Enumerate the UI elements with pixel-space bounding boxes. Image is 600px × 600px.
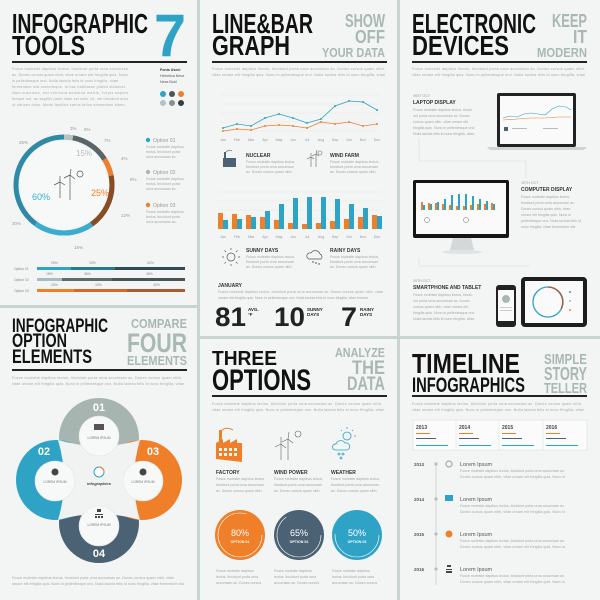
cloverleaf diagram: LOREM IPSUM xyxy=(87,523,111,527)
text: january: ornare elit fringilla quis. Nunc in pellentesque orci. Nulla lacinia felis id nunc fringilla, vitae fermen xyxy=(218,296,368,300)
text: wind farm: Fusce molestie dapibus lectus, xyxy=(330,160,379,164)
panel: infographic option elements: ornare elit fringilla quis. Nunc in pellentesque orci. Nulla lacinia felis id nunc fringilla, vitae fermentum nisi xyxy=(12,582,184,586)
text block: intro: tempor est, ac sagittis justo diam vel odio. Ut, vel tincidunt arcu xyxy=(12,97,128,101)
text: laptop display: unt porta urna accumsan ac. Donec xyxy=(413,114,470,118)
legend: lectus, tincidunt porta xyxy=(146,150,180,154)
legend xyxy=(146,138,184,224)
title: infographic option elements: ELEMENTS xyxy=(12,346,92,368)
circle: option 03 50% xyxy=(332,510,382,560)
cloverleaf diagram xyxy=(16,398,182,563)
panel: electronic devices: Fusce molestie dapibus lectus, tincidunt porta urna accumsan ac. Donec cursus quam nibh, xyxy=(412,67,585,71)
donut chart: 15% xyxy=(74,245,83,250)
circle: option 02 65% xyxy=(274,510,324,560)
line chart xyxy=(220,95,380,142)
donut chart: 12% xyxy=(121,213,130,218)
donut chart: 3% xyxy=(70,126,77,131)
timeline: 2013 xyxy=(414,462,425,467)
panel: three options: accumsan ac. Donec cursus xyxy=(332,581,377,585)
panel: three options: lectus, tincidunt porta urna xyxy=(332,575,374,579)
stacked bars: Option 02 xyxy=(14,278,29,282)
donut chart: 25% xyxy=(19,140,28,145)
subtitle: keep it modern: KEEP xyxy=(552,11,587,31)
timeline: Fusce molestie dapibus lectus, tincidunt porta urna accumsan ac. xyxy=(460,469,565,473)
panel: infographic option elements: vitae ornare elit fringilla quis. Nunc in pellentesque orci. Nulla lacinia felis id nunc fringilla, vitae xyxy=(12,382,184,386)
text: computer display: Fusce molestie dapibus lectus, xyxy=(521,195,570,199)
icon: weather xyxy=(332,427,356,459)
bar chart: Feb xyxy=(234,235,240,239)
text: weather xyxy=(331,470,380,493)
subtitle: analyze the data: DATA xyxy=(347,374,385,395)
text: wind power: tincidunt porta urna accumsan xyxy=(274,483,322,487)
text: weather: tincidunt porta urna accumsan xyxy=(331,483,379,487)
text: smartphone and tablet: Fusce molestie dapibus lectus, tincid- xyxy=(413,293,474,297)
stacked bars: 36% xyxy=(84,272,91,276)
subtitle: analyze the data xyxy=(335,345,385,395)
stacked bars: 33% xyxy=(95,283,102,287)
title: infographic tools: TOOLS xyxy=(12,30,85,61)
title: infographic tools xyxy=(12,8,148,61)
text block: intro: ac. Donec cursus quam nibh, vitae ornare elit fringilla quis. Nunc xyxy=(12,73,128,77)
panel: line & bar graph: Fusce molestie dapibus lectus, tincidunt porta urna accumsan ac. Donec cursus quam nibh, xyxy=(212,67,385,71)
legend: urna accumsan ac. xyxy=(146,187,176,191)
title: line&bar graph: GRAPH xyxy=(212,30,290,61)
text: computer display xyxy=(521,181,581,229)
panel: infographic option elements xyxy=(12,315,187,586)
circle: option 01 80%: OPTION 01 xyxy=(231,540,249,544)
text: smartphone and tablet xyxy=(413,279,481,321)
stacked bars xyxy=(14,261,185,293)
panel: three options: vitae ornare elit fringilla quis. Nunc in pellentesque orci. Nulla lacinia felis id nunc fringilla, vitae xyxy=(212,408,384,412)
subtitle: keep it modern: MODERN xyxy=(537,45,587,60)
subtitle: keep it modern: IT xyxy=(573,27,587,47)
subtitle: show off your data: YOUR DATA xyxy=(322,45,386,60)
text: factory xyxy=(216,470,265,493)
title: timeline infographics xyxy=(412,348,525,397)
icon: factory xyxy=(216,428,242,462)
fonts used + palette xyxy=(160,68,184,106)
text: computer display: ornare elit fringilla quis. Nunc in xyxy=(521,213,571,217)
text: laptop display xyxy=(413,94,475,136)
donut chart: 20% xyxy=(12,221,21,226)
cloverleaf diagram: LOREM IPSUM xyxy=(131,480,155,484)
panel: infographic option elements: Fusce molestie dapibus lectus, tincidunt porta urna accumsan ac. Donec cursus quam nibh, xyxy=(12,376,182,380)
big number 7: 7 xyxy=(154,2,186,69)
text: computer display: nunc fringilla, vitae fermentum nisi xyxy=(521,225,576,229)
title: electronic devices: DEVICES xyxy=(412,30,509,61)
circle: option 03 50%: OPTION 03 xyxy=(348,540,366,544)
timeline: 2015 xyxy=(414,532,425,537)
line chart: Oct xyxy=(346,138,352,142)
title: timeline infographics: INFOGRAPHICS xyxy=(412,374,525,397)
text: wind farm xyxy=(330,153,379,174)
text block: intro xyxy=(12,67,128,107)
text block: intro: Nam maximus, est vehicula euismod mattis, turpis sapien xyxy=(12,91,128,95)
text block: intro: in pellentesque orci. Nulla lacinia felis id nunc fringilla, vitae xyxy=(12,79,118,83)
bar chart: Nov xyxy=(360,235,366,239)
stacked bars: 25% xyxy=(51,261,58,265)
stats: SUNNY xyxy=(307,307,323,312)
timeline: Donec cursus quam nibh, vitae ornare elit fringilla quis. Nunc in xyxy=(460,545,565,549)
timeline: Lorem Ipsum xyxy=(460,462,493,468)
stats: 7 xyxy=(341,302,357,332)
text: nuclear xyxy=(246,153,295,174)
text: nuclear: tincidunt porta urna accumsan xyxy=(246,165,294,169)
icon: wind farm xyxy=(307,150,322,167)
text: wind farm: WIND FARM xyxy=(330,153,359,159)
text: wind power: Fusce molestie dapibus lectus, xyxy=(274,477,323,481)
line chart: Nov xyxy=(360,138,366,142)
stacked bars: 42% xyxy=(147,261,154,265)
timeline: Fusce molestie dapibus lectus, tincidunt porta urna accumsan ac. xyxy=(460,504,565,508)
title: infographic option elements xyxy=(12,315,108,368)
fonts used + palette: Fonts Used: xyxy=(160,68,181,72)
stacked bars: 42% xyxy=(153,283,160,287)
text: january: JANUARY xyxy=(218,283,243,289)
line chart: Jun xyxy=(290,138,296,142)
title: three options: THREE xyxy=(212,348,277,370)
icon: laptop xyxy=(487,93,587,150)
panel: line & bar graph xyxy=(212,8,387,332)
text: laptop display: 09ST OCT xyxy=(413,94,431,98)
donut chart: 7% xyxy=(104,138,111,143)
stats: AVG. xyxy=(248,307,259,312)
text: rainy days xyxy=(330,248,379,269)
text: smartphone and tablet: fringilla quis. Nunc in pellentesque orci xyxy=(413,311,475,315)
title: timeline infographics: TIMELINE xyxy=(412,348,520,379)
stacked bars: Option 03 xyxy=(14,289,29,293)
cloverleaf diagram: 04 xyxy=(93,548,106,560)
legend: lectus, tincidunt porta xyxy=(146,215,180,219)
line chart: Mar xyxy=(248,138,255,142)
text: computer display: 15TH OCT xyxy=(521,181,539,185)
panel: three options: lectus, tincidunt porta urna xyxy=(216,575,258,579)
text: wind power: ac. Donec cursus quam nibh. xyxy=(274,489,321,493)
subtitle: compare four elements: FOUR xyxy=(127,328,187,358)
stats: DAYS xyxy=(307,312,319,317)
text: nuclear: ac. Donec cursus quam nibh. xyxy=(246,170,293,174)
title: infographic option elements: OPTION xyxy=(12,330,67,352)
panel: three options: accumsan ac. Donec cursus xyxy=(274,581,319,585)
text: factory: ac. Donec cursus quam nibh. xyxy=(216,489,263,493)
text: january: Fusce molestie dapibus lectus, tincidunt porta urna accumsan ac. Donec cursus quam nibh, vitae xyxy=(218,290,383,294)
circle: option 03 50%: 50% xyxy=(348,528,366,538)
panel: three options: accumsan ac. Donec cursus xyxy=(216,581,261,585)
timeline: Donec cursus quam nibh, vitae ornare elit fringilla quis. Nunc in xyxy=(460,510,565,514)
line chart: May xyxy=(276,138,283,142)
text: rainy days: tincidunt porta urna accumsan xyxy=(330,260,378,264)
text: laptop display: fringilla quis. Nunc in pellentesque orci xyxy=(413,126,475,130)
text: smartphone and tablet: unt porta urna accumsan ac. Donec xyxy=(413,299,470,303)
cloverleaf diagram: 03 xyxy=(147,446,159,458)
cloverleaf diagram: LOREM IPSUM xyxy=(43,480,67,484)
legend: Fusce molestie dapibus xyxy=(146,145,184,149)
panel: three options xyxy=(212,345,387,585)
stacked bars: 33% xyxy=(89,261,96,265)
line chart: Aug xyxy=(318,138,324,142)
icon: wind power xyxy=(275,431,301,460)
icon: smartphone xyxy=(496,285,516,327)
panel: electronic devices xyxy=(412,8,587,327)
stats: DAYS xyxy=(360,312,372,317)
title: three options xyxy=(212,348,311,397)
stacked bars: Option 01 xyxy=(14,267,29,271)
stacked bars: 25% xyxy=(51,283,58,287)
stacked bars: 46% xyxy=(146,272,153,276)
timeline: Lorem Ipsum xyxy=(460,532,493,538)
cloverleaf diagram: 01 xyxy=(93,402,105,414)
circle: option 01 80% xyxy=(215,510,265,560)
text: sunny days: ac. Donec cursus quam nibh. xyxy=(246,265,293,269)
panel: infographic option elements: Fusce molestie dapibus lectus, tincidunt porta urna accumsan ac. Donec cursus quam nibh, vitae xyxy=(12,576,174,580)
text: wind farm: tincidunt porta urna accumsan xyxy=(330,165,378,169)
panel: timeline infographics: vitae ornare elit fringilla quis. Nunc in pellentesque orci. Nulla lacinia felis id nunc fringilla, vitae xyxy=(412,408,584,412)
text block: intro: Fusce molestie dapibus lectus, tincidunt porta urna accumsan xyxy=(12,67,128,71)
text: laptop display: LAPTOP DISPLAY xyxy=(413,100,456,106)
bar chart: May xyxy=(276,235,283,239)
donut chart: 9% xyxy=(130,177,137,182)
text: rainy days: ac. Donec cursus quam nibh. xyxy=(330,265,377,269)
bar chart xyxy=(218,192,382,239)
text: sunny days xyxy=(246,248,295,269)
text: smartphone and tablet: SMARTPHONE AND TABLET xyxy=(413,285,481,291)
timeline: 2016 xyxy=(414,567,425,572)
panel: three options: Fusce molestie dapibus xyxy=(274,569,312,573)
legend: urna accumsan ac. xyxy=(146,220,176,224)
text: rainy days: Fusce molestie dapibus lectus, xyxy=(330,255,379,259)
text: smartphone and tablet: cursus quam nibh, vitae ornare elit xyxy=(413,305,468,309)
text block: intro: fermentum nisi scelerisque. In hac habitasse platea dictumst. xyxy=(12,85,126,89)
stacked bars: 18% xyxy=(46,272,53,276)
timeline xyxy=(414,461,565,585)
subtitle: show off your data: SHOW xyxy=(345,11,385,31)
text: rainy days: RAINY DAYS xyxy=(330,248,361,254)
title: line&bar graph xyxy=(212,8,313,61)
line chart: Jan xyxy=(220,138,226,142)
text: january xyxy=(218,283,383,300)
icon: nuclear factory xyxy=(223,150,236,167)
text: factory: FACTORY xyxy=(216,470,240,476)
cloverleaf diagram: LOREM IPSUM xyxy=(87,436,111,440)
text: wind farm: ac. Donec cursus quam nibh. xyxy=(330,170,377,174)
text: sunny days: SUNNY DAYS xyxy=(246,248,279,254)
title: three options: OPTIONS xyxy=(212,364,311,397)
text: weather: Fusce molestie dapibus lectus, xyxy=(331,477,380,481)
text block: intro: ut ultrices dolor. Morbi facilisis varius tellus elementum biben- xyxy=(12,103,127,107)
bar chart: Apr xyxy=(262,235,269,239)
text: sunny days: Fusce molestie dapibus lectus, xyxy=(246,255,295,259)
text: wind power: WIND POWER xyxy=(274,470,308,476)
cloverleaf diagram: 02 xyxy=(38,446,50,458)
legend: Option 03 xyxy=(153,203,176,209)
panel: electronic devices: vitae ornare elit fringilla quis. Nunc in pellentesque orci. Nulla lacinia felis id nunc fringilla, vitae xyxy=(412,73,585,77)
line chart: Jul xyxy=(305,138,309,142)
year cards: 2014 xyxy=(459,425,470,431)
text: laptop display: cursus quam nibh, vitae ornare elit xyxy=(413,120,468,124)
panel: three options: Fusce molestie dapibus xyxy=(216,569,254,573)
text: smartphone and tablet: Nulla lacinia felis id nunc fringilla, vitae xyxy=(413,317,474,321)
icon: sun xyxy=(222,248,240,266)
text: sunny days: tincidunt porta urna accumsan xyxy=(246,260,294,264)
bar chart: Aug xyxy=(318,235,324,239)
cloverleaf diagram: infographics xyxy=(87,481,112,486)
fonts used + palette: Helvetica Neue xyxy=(160,74,184,78)
title: electronic devices: ELECTRONIC xyxy=(412,8,536,39)
legend: Option 01 xyxy=(153,138,176,144)
title: electronic devices xyxy=(412,8,536,61)
panel: three options: lectus, tincidunt porta urna xyxy=(274,575,316,579)
connector lines xyxy=(419,138,530,266)
text: laptop display: Fusce molestie dapibus lectus, tincid- xyxy=(413,108,474,112)
stats: °F xyxy=(248,312,253,317)
fonts used + palette: Nexa Bold xyxy=(160,80,177,84)
line chart: Dec xyxy=(374,138,380,142)
donut chart: 4% xyxy=(121,156,128,161)
text: nuclear: NUCLEAR xyxy=(246,153,271,159)
panel: infographic tools xyxy=(12,2,187,293)
stats: 81 xyxy=(215,302,246,332)
timeline: 2014 xyxy=(414,497,425,502)
bar chart: Jan xyxy=(220,235,226,239)
bar chart: Sep xyxy=(332,235,338,239)
stats xyxy=(215,302,374,332)
year cards: 2015 xyxy=(502,425,513,431)
text: smartphone and tablet: 20TH OCT xyxy=(413,279,431,283)
line chart: Feb xyxy=(234,138,240,142)
text: factory: tincidunt porta urna accumsan xyxy=(216,483,264,487)
circle: option 02 65%: OPTION 02 xyxy=(290,540,308,544)
text: weather: ac. Donec cursus quam nibh. xyxy=(331,489,378,493)
text: nuclear: Fusce molestie dapibus lectus, xyxy=(246,160,295,164)
donut chart xyxy=(12,126,137,250)
title: infographic tools: INFOGRAPHIC xyxy=(12,8,148,39)
donut chart: 15% xyxy=(76,149,92,158)
panel: three options: Fusce molestie dapibus lectus, tincidunt porta urna accumsan ac. Donec cursus quam nibh, xyxy=(212,402,382,406)
bar chart: Oct xyxy=(346,235,352,239)
text: weather: WEATHER xyxy=(331,470,356,476)
donut chart: 60% xyxy=(32,192,50,202)
subtitle: keep it modern xyxy=(537,11,587,60)
subtitle: compare four elements: COMPARE xyxy=(131,316,187,331)
timeline: Donec cursus quam nibh, vitae ornare elit fringilla quis. Nunc in xyxy=(460,580,565,584)
legend: Fusce molestie dapibus xyxy=(146,177,184,181)
timeline: Fusce molestie dapibus lectus, tincidunt porta urna accumsan ac. xyxy=(460,574,565,578)
bar chart: Dec xyxy=(374,235,380,239)
text: computer display: Donec cursus quam nibh, vitae xyxy=(521,207,570,211)
legend: Fusce molestie dapibus xyxy=(146,210,184,214)
timeline: Fusce molestie dapibus lectus, tincidunt porta urna accumsan ac. xyxy=(460,539,565,543)
subtitle: compare four elements: ELEMENTS xyxy=(127,353,187,368)
text: computer display: COMPUTER DISPLAY xyxy=(521,187,573,193)
year cards: 2013 xyxy=(416,425,427,431)
timeline: Lorem Ipsum xyxy=(460,567,493,573)
panel: timeline infographics xyxy=(412,348,587,585)
text: computer display: pellentesque orci. Nulla lacinia felis id xyxy=(521,219,581,223)
subtitle: show off your data: OFF xyxy=(355,27,385,47)
subtitle: compare four elements xyxy=(127,316,187,368)
panel: three options: Fusce molestie dapibus xyxy=(332,569,370,573)
bar chart: Jun xyxy=(290,235,296,239)
circle: option 02 65%: 65% xyxy=(290,528,308,538)
year cards: 2016 xyxy=(546,425,557,431)
line chart: Sep xyxy=(332,138,338,142)
icon: wind turbines xyxy=(54,169,83,200)
text: computer display: tincidunt porta urna accumsan ac. xyxy=(521,201,575,205)
icon: tablet xyxy=(521,277,587,327)
icon: desktop monitor xyxy=(413,180,509,254)
subtitle: simple story teller: SIMPLE xyxy=(544,351,587,368)
text: wind power xyxy=(274,470,323,493)
legend: Option 02 xyxy=(153,170,176,176)
legend: lectus, tincidunt porta xyxy=(146,182,180,186)
legend: urna accumsan ac. xyxy=(146,155,176,159)
text: laptop display: Nulla lacinia felis id nunc fringilla, vitae xyxy=(413,132,474,136)
stats: 10 xyxy=(274,302,305,332)
subtitle: analyze the data: ANALYZE xyxy=(335,345,385,360)
panel: timeline infographics: Fusce molestie dapibus lectus, tincidunt porta urna accumsan ac. Donec cursus quam nibh, xyxy=(412,402,582,406)
donut chart: 5% xyxy=(84,127,91,132)
title: infographic option elements: INFOGRAPHIC xyxy=(12,315,108,337)
timeline: Lorem Ipsum xyxy=(460,497,493,503)
icon: rain cloud xyxy=(307,251,322,265)
bar chart: Jul xyxy=(305,235,309,239)
line chart: Apr xyxy=(262,138,269,142)
stats: RAINY xyxy=(360,307,374,312)
title: line&bar graph: LINE&BAR xyxy=(212,8,313,39)
panel: line & bar graph: vitae ornare elit fringilla quis. Nunc in pellentesque orci. Nulla lacinia felis id nunc fringilla, vitae xyxy=(212,73,385,77)
subtitle: show off your data xyxy=(322,11,386,60)
donut chart: 25% xyxy=(91,188,109,198)
text: factory: Fusce molestie dapibus lectus, xyxy=(216,477,265,481)
bar chart: Mar xyxy=(248,235,255,239)
circle: option 01 80%: 80% xyxy=(231,528,249,538)
year cards xyxy=(413,420,587,450)
subtitle: analyze the data: THE xyxy=(352,358,385,379)
timeline: Donec cursus quam nibh, vitae ornare elit fringilla quis. Nunc in xyxy=(460,475,565,479)
subtitle: simple story teller xyxy=(544,351,587,397)
